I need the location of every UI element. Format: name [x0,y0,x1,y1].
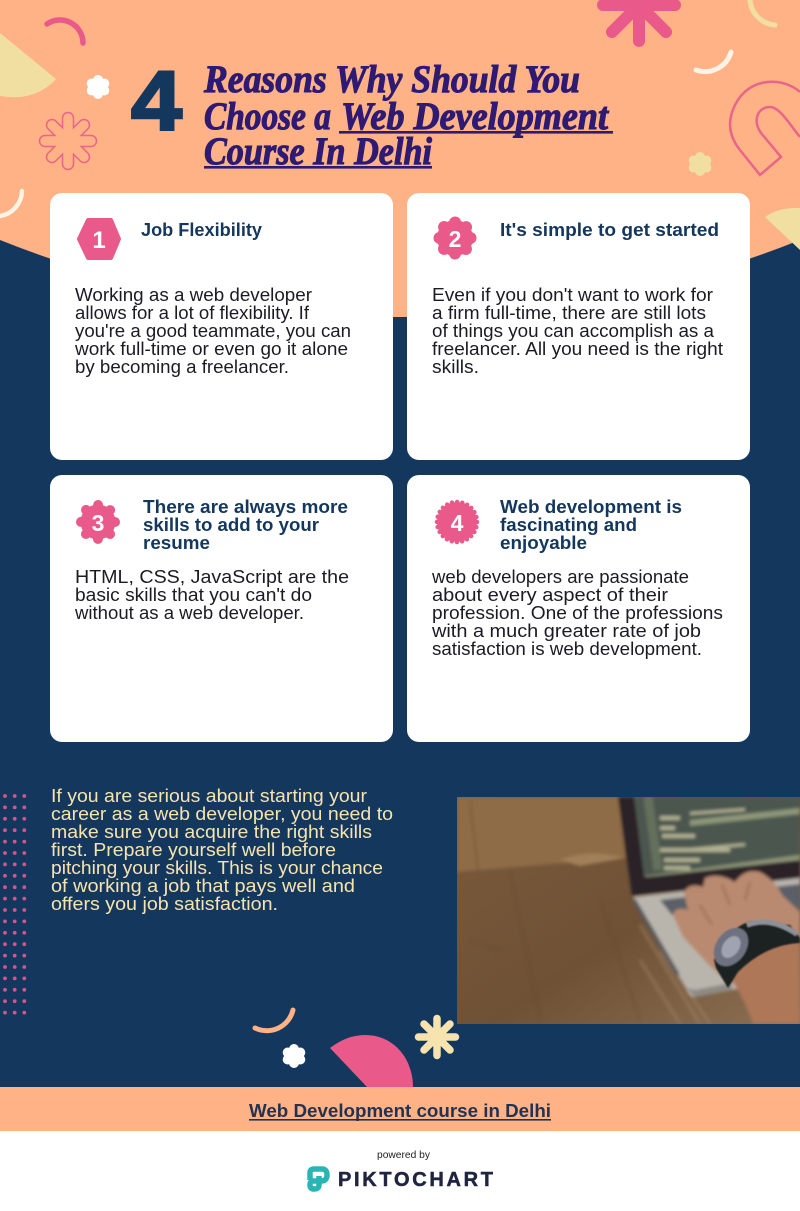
body text 2: a firm full-time, there are still lots [432,303,706,323]
heading 3 [143,497,348,553]
forearm [730,942,800,1024]
title number 4: 4 [131,54,182,148]
hand [673,871,800,985]
heading 2: It's simple to get started [500,220,719,240]
decoration: beige arc top right [750,0,775,25]
laptop base [633,878,800,997]
panel: more skills [50,475,393,742]
heading 4 [500,497,682,553]
peach header shape with curved bottom [0,0,800,317]
body text 3: HTML, CSS, JavaScript are the [75,567,349,587]
body text 4: profession. One of the professions [432,603,723,623]
body text 1: you're a good teammate, you can [75,321,351,341]
decoration: pink outlined U shape [730,82,800,175]
heading 3: skills to add to your [143,515,319,535]
icon: piktochart logo [310,1169,327,1189]
body text 2 [432,285,723,377]
decoration: pink quarter circle [330,1035,413,1087]
keyboard [660,882,800,916]
body text 1: work full-time or even go it alone [74,339,348,359]
badge 1: 1 [92,227,106,254]
body text 4: satisfaction is web development. [432,639,702,659]
footer band with link [0,1087,800,1131]
body text 1: allows for a lot of flexibility. If [75,303,310,323]
badge 2 [437,220,473,256]
decoration: pink arc [47,20,83,43]
badge 3 [80,504,116,540]
decoration: dot grid [5,796,24,1014]
decoration: white flower [92,80,104,94]
badge 2: 2 [449,226,461,252]
decoration: pink asterisk top [603,0,675,41]
closing paragraph: If you are serious about starting your [51,786,367,806]
title: Web Development [341,95,609,138]
footer band with link: Web Development course in Delhi [249,1101,551,1121]
photo: hand typing code on laptop on wooden desk [457,797,800,1024]
decoration: peach arc bottom [255,1010,293,1031]
body text 3 [74,567,349,623]
footer white area [0,1131,800,1211]
closing paragraph: of working a job that pays well and [51,876,355,896]
panel: fascinating and enjoyable [407,475,750,742]
closing paragraph [51,786,393,914]
body text 4: web developers are passionate [431,567,689,587]
heading 4: enjoyable [500,533,587,553]
laptop lid [618,797,800,896]
panel: job flexibility [50,193,393,460]
closing paragraph: first. Prepare yourself well before [51,840,336,860]
badge 4 [437,502,477,542]
closing paragraph: pitching your skills. This is your chance [51,858,383,878]
body text 1: Working as a web developer [75,285,312,305]
panel: simple to get started [407,193,750,460]
title: Reasons Why Should You [203,58,580,101]
decoration: white arc right [696,52,731,72]
body text 3: basic skills that you can't do [75,585,312,605]
heading 3: resume [143,533,210,553]
heading 4: Web development is [500,497,682,517]
heading 3: There are always more [143,497,348,517]
body text 1 [74,285,351,377]
wordmark: piktochart: PIKTOCHART [338,1169,493,1191]
powered by text: powered by [377,1149,431,1161]
closing paragraph: career as a web developer, you need to [51,804,393,824]
body text 2: freelancer. All you need is the right [432,339,723,359]
body text 2: Even if you don't want to work for [432,285,713,305]
closing paragraph: offers you job satisfaction. [51,894,278,914]
badge 1 [79,220,119,258]
body text 3: without as a web developer. [74,603,304,623]
wristwatch [714,921,800,988]
decoration: white arc left [0,191,22,216]
heading 4: fascinating and [500,515,637,535]
body text 4: with a much greater rate of job [431,621,701,641]
decoration: beige half circle [0,33,56,97]
badge 3: 3 [92,510,104,536]
decoration: beige flower [694,157,706,171]
title: Course In Delhi [204,130,432,173]
badge 4: 4 [451,510,464,536]
decoration: white flower bottom [288,1049,300,1063]
decoration: pink outline flower [45,118,91,164]
body text 1: by becoming a freelancer. [75,357,289,377]
title [203,58,613,173]
body text 4: about every aspect of their [432,585,668,605]
decoration: beige pie right [765,208,800,250]
title: Choose a [204,95,331,138]
closing paragraph: make sure you acquire the right skills [51,822,372,842]
heading 1: Job Flexibility [141,220,262,240]
decoration: beige asterisk [418,1018,456,1056]
body text 2: skills. [432,357,479,377]
laptop display [634,797,800,876]
body text 2: of things you can accomplish as a [432,321,715,341]
body text 4 [431,567,723,659]
